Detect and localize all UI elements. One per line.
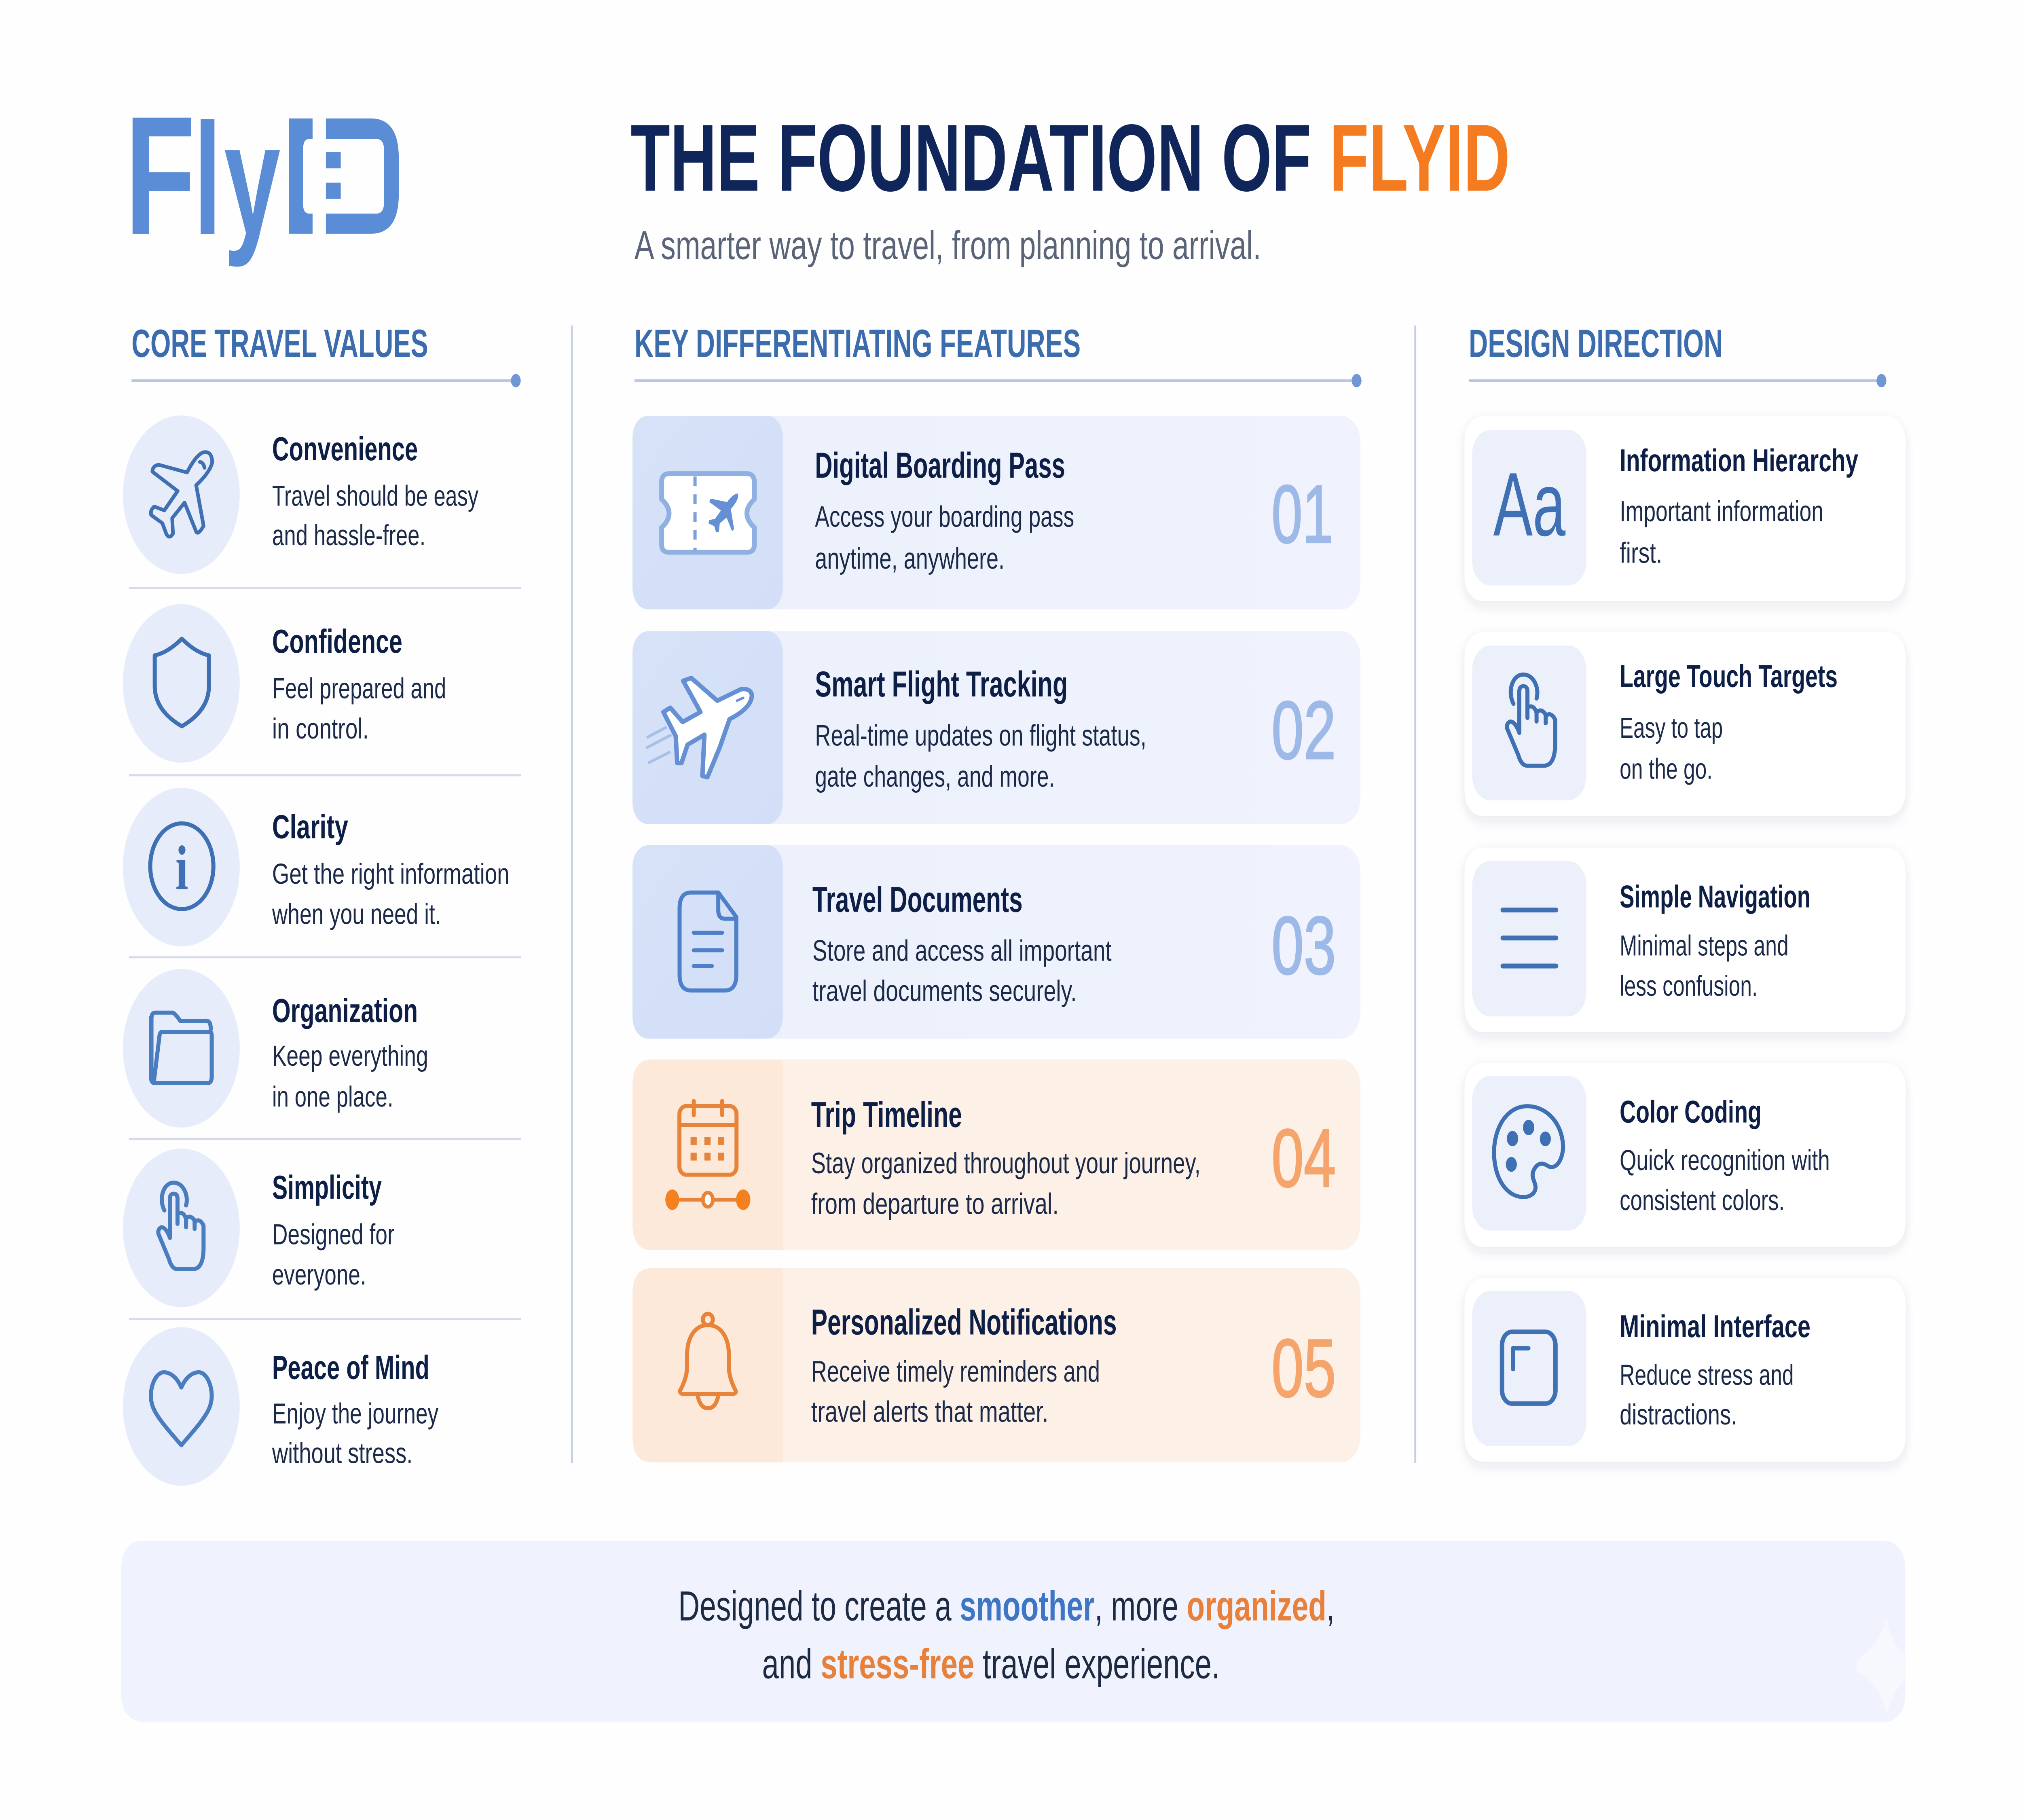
card: information hierarchy [1464, 416, 1906, 601]
text: color coding: Quick recognition with [1620, 1144, 1830, 1177]
text: personalized notifications: Receive timely reminders and [811, 1355, 1100, 1388]
text: confidence: in control. [272, 713, 369, 745]
item: clarity [123, 788, 510, 946]
icon: menu lines [1503, 910, 1556, 966]
text: clarity: Clarity [272, 809, 348, 846]
icon: sparkle [1857, 1617, 1905, 1715]
item: confidence [123, 604, 446, 763]
text: travel documents [812, 879, 1112, 1007]
text: travel documents: travel documents securely. [812, 974, 1077, 1007]
text: large touch targets [1620, 659, 1838, 785]
heading: design direction: DESIGN DIRECTION [1469, 322, 1723, 366]
icon: tapping hand [1507, 675, 1555, 766]
text: organization: Organization [272, 993, 418, 1029]
text: clarity: Get the right information [272, 858, 510, 890]
title: THE FOUNDATION OF FLYID [630, 104, 1510, 211]
text: large touch targets: Easy to tap [1620, 712, 1723, 744]
logo word: Fly: y [224, 91, 281, 269]
footer line 2: and stress-free travel experience. [762, 1640, 1220, 1687]
text: smart flight tracking: Smart Flight Tracking [815, 664, 1068, 704]
item: simplicity [123, 1149, 395, 1307]
text: simplicity: everyone. [272, 1259, 366, 1291]
text: peace of mind: Enjoy the journey [272, 1398, 439, 1430]
number 05: 05 [1271, 1322, 1336, 1414]
text: digital boarding pass: Digital Boarding Pass [815, 445, 1065, 486]
icon: info in circle [123, 788, 240, 946]
heading: core travel values: CORE TRAVEL VALUES [131, 322, 428, 366]
text: trip timeline: Stay organized throughout your journey, [811, 1147, 1201, 1180]
feature 02: smart flight tracking [632, 631, 1360, 824]
text: information hierarchy [1620, 443, 1858, 569]
text: large touch targets: Large Touch Targets [1620, 659, 1838, 694]
item: organization [123, 969, 428, 1128]
icon: ticket [662, 474, 754, 552]
feature 05: personalized notifications [632, 1268, 1360, 1462]
text: minimal interface: Minimal Interface [1620, 1309, 1810, 1344]
text: simplicity: Designed for [272, 1219, 395, 1251]
text: clarity: when you need it. [272, 898, 441, 931]
panel: core travel values [123, 322, 521, 1486]
text: digital boarding pass: Access your boarding pass [815, 500, 1074, 533]
icon: airplane in circle [123, 415, 240, 574]
text: color coding: Color Coding [1620, 1094, 1762, 1130]
text: clarity [272, 809, 510, 931]
text: trip timeline: from departure to arrival. [811, 1187, 1059, 1221]
text: simple navigation [1620, 879, 1810, 1002]
text: personalized notifications [811, 1302, 1117, 1428]
text: simplicity [272, 1169, 395, 1291]
card: large touch targets [1464, 632, 1906, 816]
text: peace of mind: without stress. [272, 1437, 412, 1469]
icon: palette [1494, 1106, 1563, 1197]
number 03: 03 [1271, 899, 1336, 991]
icon: bell [680, 1314, 736, 1408]
text: trip timeline [811, 1094, 1201, 1221]
text: smart flight tracking: Real-time updates on flight status, [815, 719, 1146, 752]
text: simplicity: Simplicity [272, 1169, 382, 1206]
text: simple navigation: Simple Navigation [1620, 879, 1810, 914]
text: color coding [1620, 1094, 1830, 1217]
text: smart flight tracking: gate changes, and more. [815, 760, 1055, 793]
text: minimal interface: Reduce stress and [1620, 1359, 1794, 1391]
card: color coding [1464, 1063, 1906, 1247]
text: confidence: Confidence [272, 623, 402, 660]
text: convenience: and hassle-free. [272, 519, 425, 552]
item: convenience [123, 415, 479, 574]
text: smart flight tracking [815, 664, 1146, 793]
feature 04: trip timeline [632, 1060, 1360, 1250]
subtitle: A smarter way to travel, from planning to arrival. [635, 222, 1261, 268]
text: simple navigation: less confusion. [1620, 970, 1758, 1002]
card: minimal interface [1464, 1278, 1906, 1462]
text: trip timeline: Trip Timeline [811, 1094, 962, 1135]
feature 01: digital boarding pass [632, 416, 1360, 609]
number 01: 01 [1271, 468, 1333, 560]
icon: document [679, 893, 736, 990]
logo mark: ID bracket and D [289, 119, 399, 234]
text: organization: in one place. [272, 1081, 393, 1113]
number 04: 04 [1271, 1112, 1336, 1204]
text: minimal interface: distractions. [1620, 1399, 1737, 1431]
text: peace of mind: Peace of Mind [272, 1350, 429, 1386]
text: digital boarding pass: anytime, anywhere. [815, 542, 1005, 575]
text: minimal interface [1620, 1309, 1810, 1431]
text: simple navigation: Minimal steps and [1620, 930, 1789, 962]
icon: folder in circle [123, 969, 240, 1128]
text: digital boarding pass [815, 445, 1074, 575]
panel: key differentiating features [632, 322, 1362, 1462]
text: travel documents: Store and access all important [812, 934, 1112, 967]
text: personalized notifications: Personalized Notifications [811, 1302, 1117, 1342]
number 02: 02 [1271, 684, 1336, 776]
feature 03: travel documents [632, 845, 1360, 1039]
icon: airplane with speed lines [646, 678, 752, 777]
icon: calendar and timeline [665, 1101, 750, 1210]
icon: Aa: Aa [1493, 453, 1566, 555]
logo word: Fly: l [194, 91, 222, 267]
text: organization: Keep everything [272, 1040, 428, 1072]
text: peace of mind [272, 1350, 439, 1469]
text: confidence [272, 623, 446, 745]
icon: heart in circle [123, 1327, 240, 1486]
text: confidence: Feel prepared and [272, 673, 446, 705]
text: convenience: Travel should be easy [272, 480, 479, 512]
text: organization [272, 993, 428, 1113]
text: large touch targets: on the go. [1620, 753, 1713, 785]
text: personalized notifications: travel alerts that matter. [811, 1395, 1048, 1428]
text: convenience: Convenience [272, 431, 418, 468]
text: travel documents: Travel Documents [812, 879, 1023, 920]
icon: tapping hand in circle [123, 1149, 240, 1307]
panel: design direction [1464, 322, 1906, 1462]
text: convenience [272, 431, 479, 552]
icon: info in circle: i [176, 833, 188, 903]
logo: FlyID [125, 81, 399, 270]
icon: minimal window [1502, 1332, 1555, 1403]
item: peace of mind [123, 1327, 439, 1486]
logo word: Fly [125, 81, 281, 270]
logo word: Fly: F [125, 81, 195, 270]
footer banner [121, 1541, 1905, 1722]
footer line 1: Designed to create a smoother, more organized, [678, 1583, 1335, 1630]
text: information hierarchy: Important information [1620, 495, 1823, 527]
text: information hierarchy: first. [1620, 537, 1662, 569]
text: color coding: consistent colors. [1620, 1184, 1785, 1217]
text: information hierarchy: Information Hierarchy [1620, 443, 1858, 478]
card: simple navigation [1464, 848, 1906, 1032]
icon: shield in circle [123, 604, 240, 763]
heading: key differentiating features: KEY DIFFERENTIATING FEATURES [635, 322, 1081, 366]
